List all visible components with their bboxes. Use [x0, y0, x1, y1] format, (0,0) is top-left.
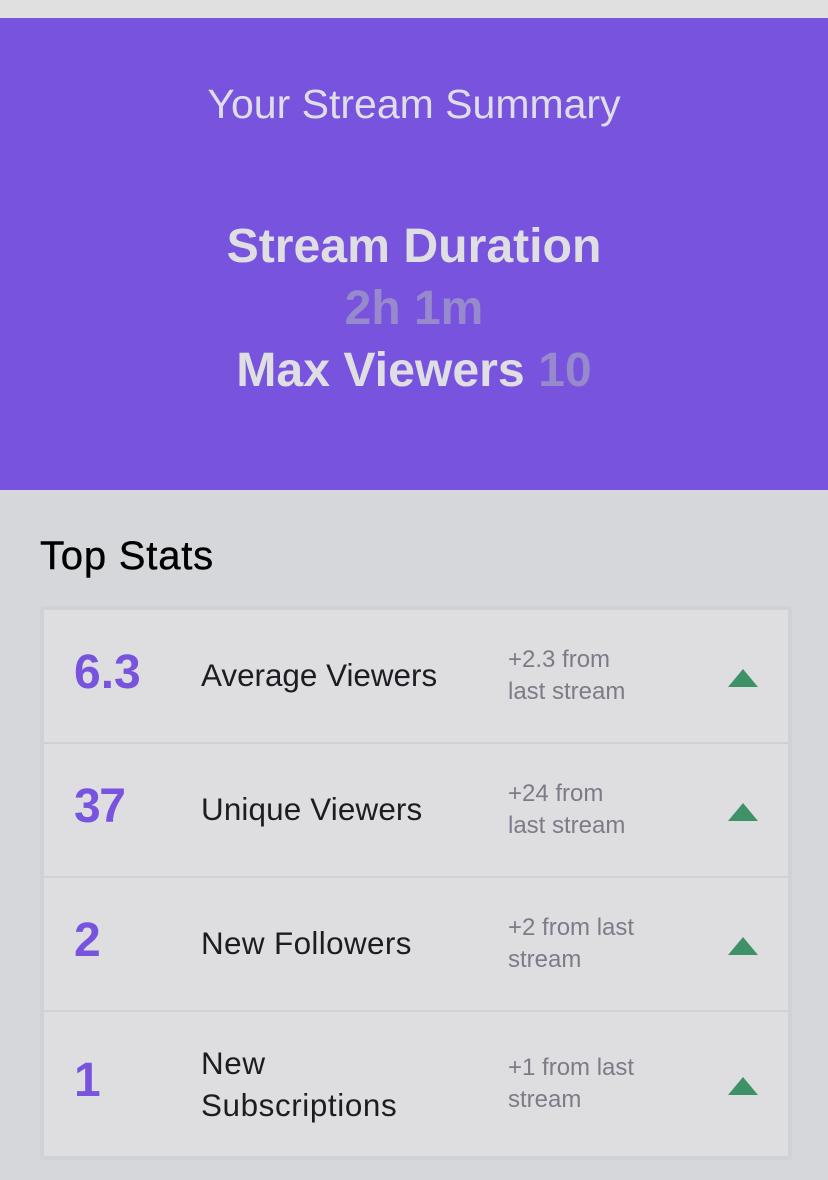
- value: 1: [74, 1054, 101, 1107]
- change text: +2 from last: [508, 914, 634, 941]
- icon: up arrow: [728, 1077, 758, 1095]
- title: Your Stream Summary: [207, 81, 621, 127]
- label: Unique Viewers: [201, 792, 422, 827]
- change text: stream: [508, 946, 581, 973]
- change text: [508, 646, 625, 705]
- label: New Followers: [201, 926, 412, 961]
- change text: +2.3 from: [508, 646, 610, 673]
- change text: +24 from: [508, 780, 603, 807]
- change text: [508, 780, 625, 839]
- label: [201, 1046, 397, 1123]
- value: 2: [74, 914, 101, 967]
- max viewers stat: Max Viewers 10: [236, 343, 592, 397]
- label: Subscriptions: [201, 1088, 397, 1123]
- change text: [508, 914, 634, 973]
- row: unique viewers: [44, 744, 788, 878]
- panel: stream summary header: [0, 18, 828, 490]
- row: new followers: [44, 878, 788, 1012]
- row: new subscriptions: [44, 1012, 788, 1156]
- change text: last stream: [508, 678, 625, 705]
- change text: +1 from last: [508, 1054, 634, 1081]
- icon: up arrow: [728, 803, 758, 821]
- top strip: [0, 0, 828, 18]
- icon: up arrow: [728, 669, 758, 687]
- stream duration label: Stream Duration: [227, 219, 601, 273]
- value: 6.3: [74, 646, 141, 699]
- change text: last stream: [508, 812, 625, 839]
- icon: up arrow: [728, 937, 758, 955]
- change text: stream: [508, 1086, 581, 1113]
- change text: [508, 1054, 634, 1113]
- stream duration value: 2h 1m: [345, 282, 483, 335]
- label: Average Viewers: [201, 658, 437, 693]
- value: 37: [74, 780, 124, 833]
- row: average viewers: [44, 610, 788, 744]
- heading: top stats: Top Stats: [40, 534, 214, 578]
- label: New: [201, 1046, 266, 1081]
- panel: stats table: [40, 606, 792, 1160]
